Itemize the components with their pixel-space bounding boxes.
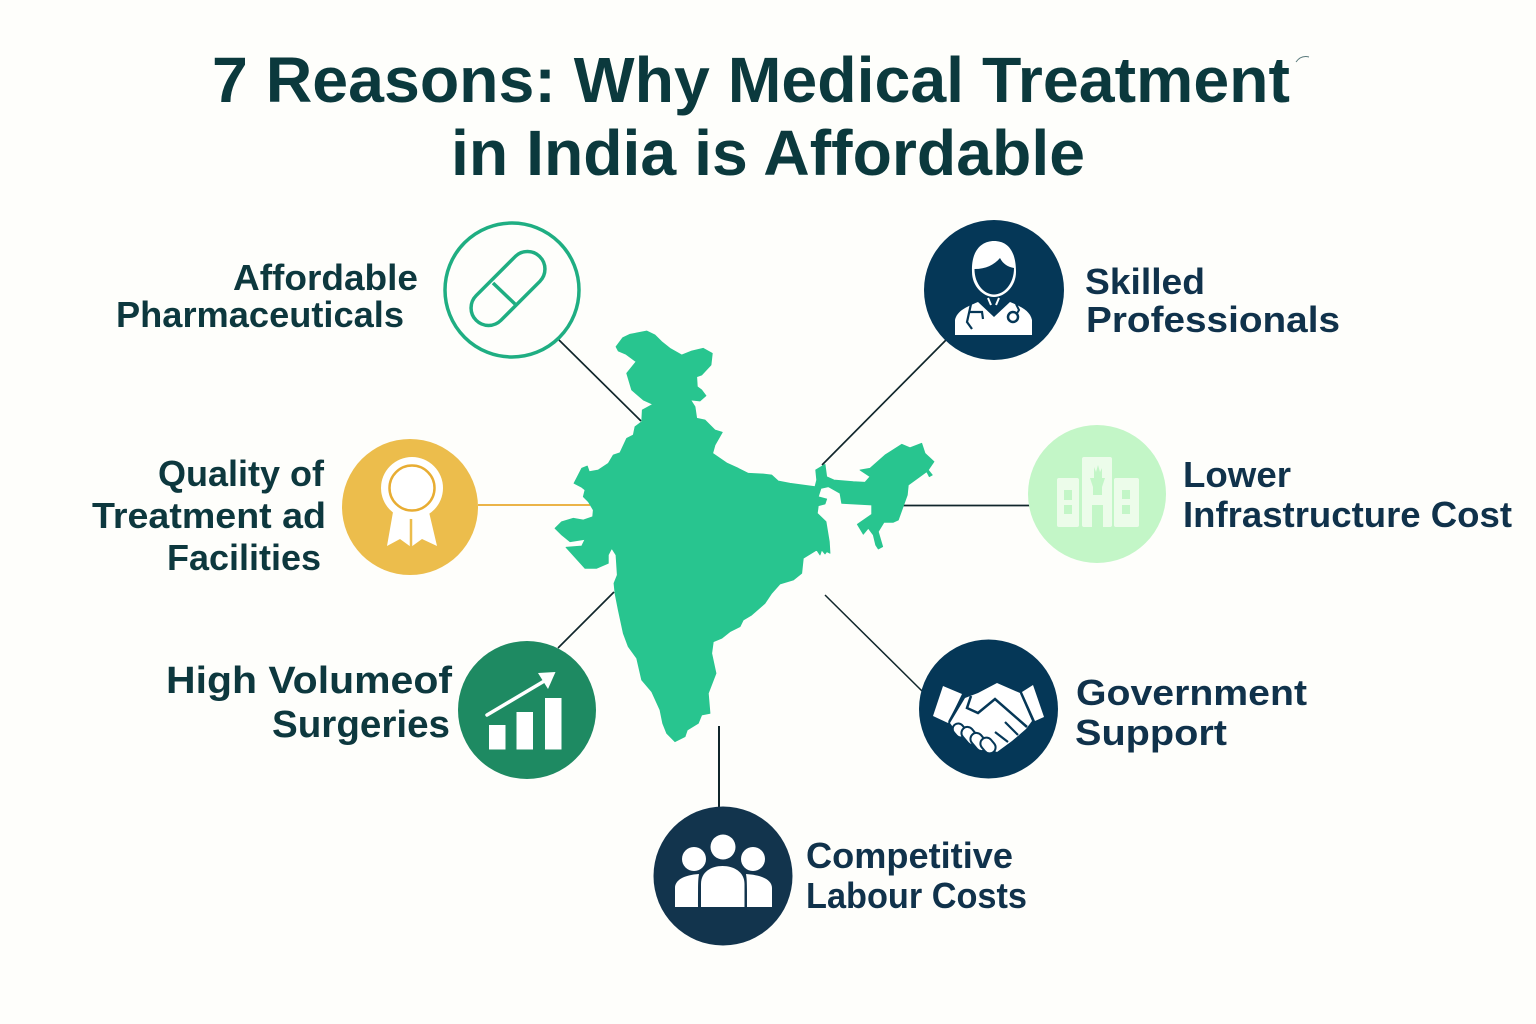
label: competitive labour costs (806, 835, 1027, 916)
title (212, 44, 1309, 189)
label: affordable pharmaceuticals (116, 257, 418, 335)
label: affordable pharmaceuticals: Affordable (233, 257, 418, 298)
label: lower infrastructure cost (1183, 454, 1512, 535)
label: lower infrastructure cost: Lower (1183, 454, 1291, 495)
icon: award ribbon (342, 439, 478, 575)
label: quality of treatment and facilities: Treatment ad (92, 495, 326, 536)
title: 7 Reasons: Why Medical Treatment (212, 44, 1290, 116)
label: skilled professionals: Professionals (1086, 299, 1340, 340)
label: lower infrastructure cost: Infrastructure Cost (1183, 494, 1512, 535)
label: high volume of surgeries (166, 660, 452, 746)
title: in India is Affordable (451, 117, 1085, 189)
label: government support: Support (1075, 712, 1227, 753)
icon: doctor (924, 220, 1064, 360)
item: competitive labour costs (654, 806, 1027, 946)
item: high volume of surgeries (166, 641, 596, 779)
icon: hospital buildings (1028, 425, 1166, 563)
label: skilled professionals (1085, 261, 1340, 340)
item: quality of treatment and facilities (92, 439, 478, 578)
icon: group of people (654, 806, 792, 946)
label: skilled professionals: Skilled (1085, 261, 1205, 302)
label: quality of treatment and facilities: Facilities (167, 537, 321, 578)
item: lower infrastructure cost (1028, 425, 1512, 563)
icon: pill (445, 223, 579, 357)
label: competitive labour costs: Labour Costs (806, 875, 1027, 916)
label: competitive labour costs: Competitive (806, 835, 1013, 876)
item: affordable pharmaceuticals (116, 223, 579, 357)
label: government support (1075, 672, 1307, 753)
label: quality of treatment and facilities: Quality of (158, 453, 325, 494)
map of India (555, 331, 934, 742)
label: quality of treatment and facilities (92, 453, 326, 578)
item: government support (919, 640, 1307, 778)
label: high volume of surgeries: High Volumeof (166, 660, 452, 702)
connector lines (478, 340, 1030, 808)
label: affordable pharmaceuticals: Pharmaceuticals (116, 294, 404, 335)
icon: rising bar chart (458, 641, 596, 779)
icon: handshake (919, 640, 1058, 778)
label: government support: Government (1076, 672, 1307, 713)
label: high volume of surgeries: Surgeries (272, 704, 450, 746)
item: skilled professionals (924, 220, 1340, 360)
